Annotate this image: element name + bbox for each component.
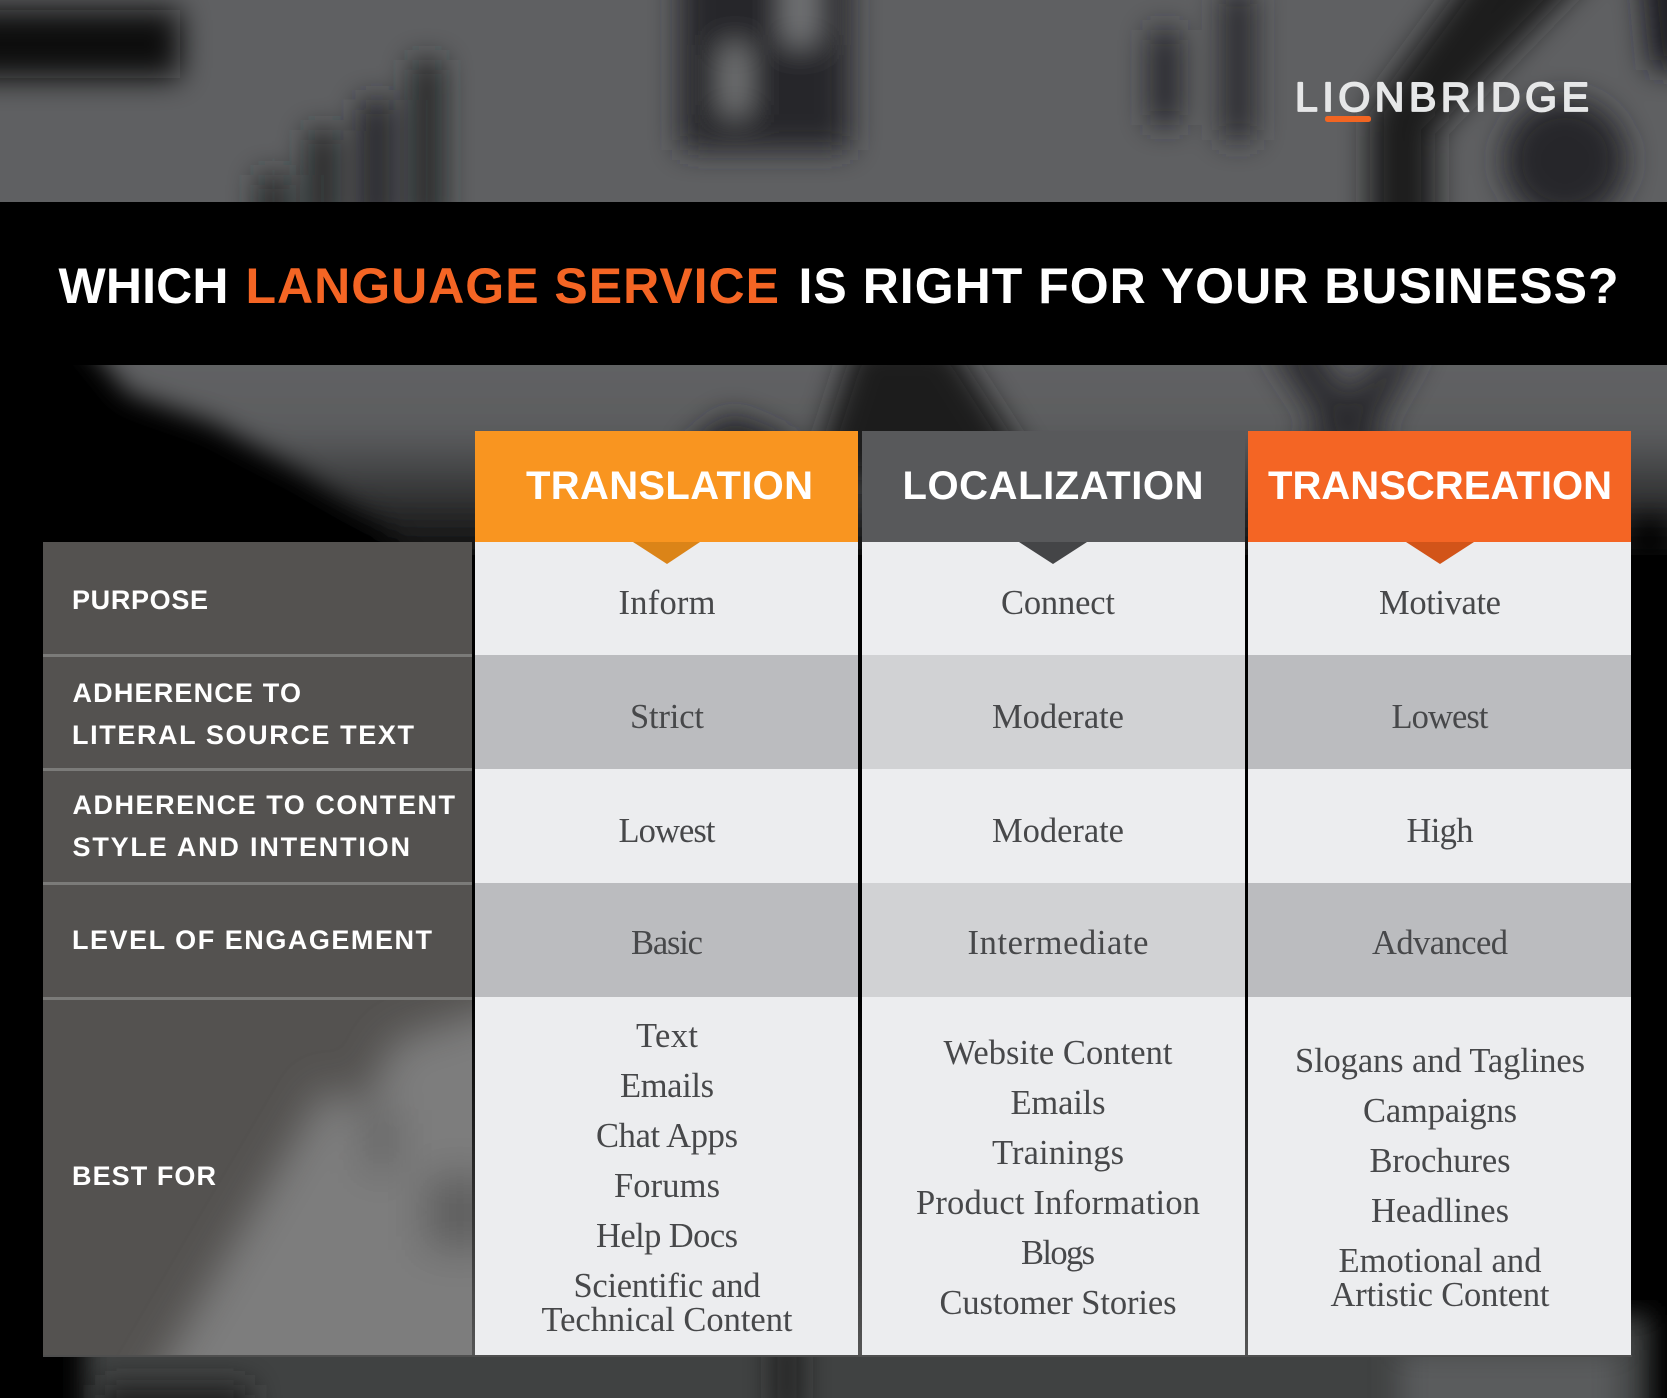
row labels panel	[43, 542, 472, 1355]
label: level of engagement: LEVEL OF ENGAGEMENT	[72, 925, 432, 955]
values: translation: Inform	[618, 584, 716, 622]
values: localization: Connect	[1001, 584, 1115, 622]
values: translation: Emails	[620, 1067, 714, 1105]
values: localization: Website Content	[944, 1034, 1173, 1072]
values: transcreation: Brochures	[1370, 1142, 1510, 1180]
values: translation: Help Docs	[596, 1217, 738, 1255]
background: top blurred photo band	[0, 0, 1667, 202]
label: adherence to literal source text	[72, 678, 414, 750]
logo: Lionbridge: LIONBRIDGE	[1295, 74, 1589, 120]
comparison table	[43, 431, 1632, 1398]
title: LANGUAGE SERVICE	[246, 258, 779, 314]
heading: transcreation: TRANSCREATION	[1268, 464, 1612, 508]
values: transcreation: Emotional and	[1338, 1242, 1542, 1280]
label: adherence to content style and intention: STYLE AND INTENTION	[72, 832, 410, 862]
title: WHICH	[58, 258, 228, 314]
label: adherence to literal source text: ADHERENCE TO	[72, 678, 301, 708]
values: transcreation: Advanced	[1372, 924, 1508, 962]
values: translation: Strict	[630, 698, 704, 736]
values: translation: Scientific and	[574, 1267, 760, 1305]
values: transcreation: Lowest	[1392, 698, 1489, 736]
title	[58, 258, 1618, 314]
values: transcreation	[1295, 584, 1585, 1314]
values: localization: Trainings	[992, 1134, 1124, 1172]
background: black title band	[0, 202, 1667, 365]
pointer: localization	[1019, 542, 1087, 564]
column: transcreation	[1248, 431, 1631, 1355]
label: adherence to content style and intention: ADHERENCE TO CONTENT	[72, 790, 456, 820]
label: adherence to literal source text: LITERAL SOURCE TEXT	[72, 720, 414, 750]
column: translation	[475, 431, 858, 1355]
values: transcreation: Slogans and Taglines	[1295, 1042, 1585, 1080]
label: best for: BEST FOR	[72, 1161, 216, 1191]
values: localization: Customer Stories	[940, 1284, 1176, 1322]
values: transcreation: Artistic Content	[1330, 1276, 1550, 1314]
values: translation: Basic	[631, 924, 703, 962]
values: translation: Forums	[614, 1167, 720, 1205]
values: transcreation: Headlines	[1371, 1192, 1509, 1230]
values: transcreation: Campaigns	[1363, 1092, 1517, 1130]
background: lower blurred photo	[0, 320, 1667, 1398]
heading: translation: TRANSLATION	[526, 464, 813, 508]
title: IS RIGHT FOR YOUR BUSINESS?	[798, 258, 1618, 314]
values: localization: Intermediate	[968, 924, 1148, 962]
values: translation: Text	[636, 1017, 698, 1055]
column gaps	[43, 1000, 1632, 1357]
values: localization: Blogs	[1021, 1234, 1095, 1272]
pointer: translation	[633, 542, 700, 564]
values: localization: Moderate	[992, 698, 1124, 736]
values: translation: Lowest	[618, 812, 716, 850]
values: translation	[542, 584, 793, 1339]
values: localization: Emails	[1010, 1084, 1106, 1122]
values: transcreation: Motivate	[1379, 584, 1501, 622]
values: localization: Product Information	[916, 1184, 1200, 1222]
pointer: transcreation	[1406, 542, 1474, 564]
values: transcreation: High	[1406, 812, 1474, 850]
label: adherence to content style and intention	[72, 790, 456, 862]
label: purpose: PURPOSE	[72, 585, 208, 615]
column: localization	[862, 431, 1245, 1355]
values: localization	[916, 584, 1200, 1322]
heading: localization: LOCALIZATION	[902, 464, 1204, 508]
values: translation: Technical Content	[542, 1301, 793, 1339]
values: translation: Chat Apps	[596, 1117, 738, 1155]
values: localization: Moderate	[992, 812, 1124, 850]
